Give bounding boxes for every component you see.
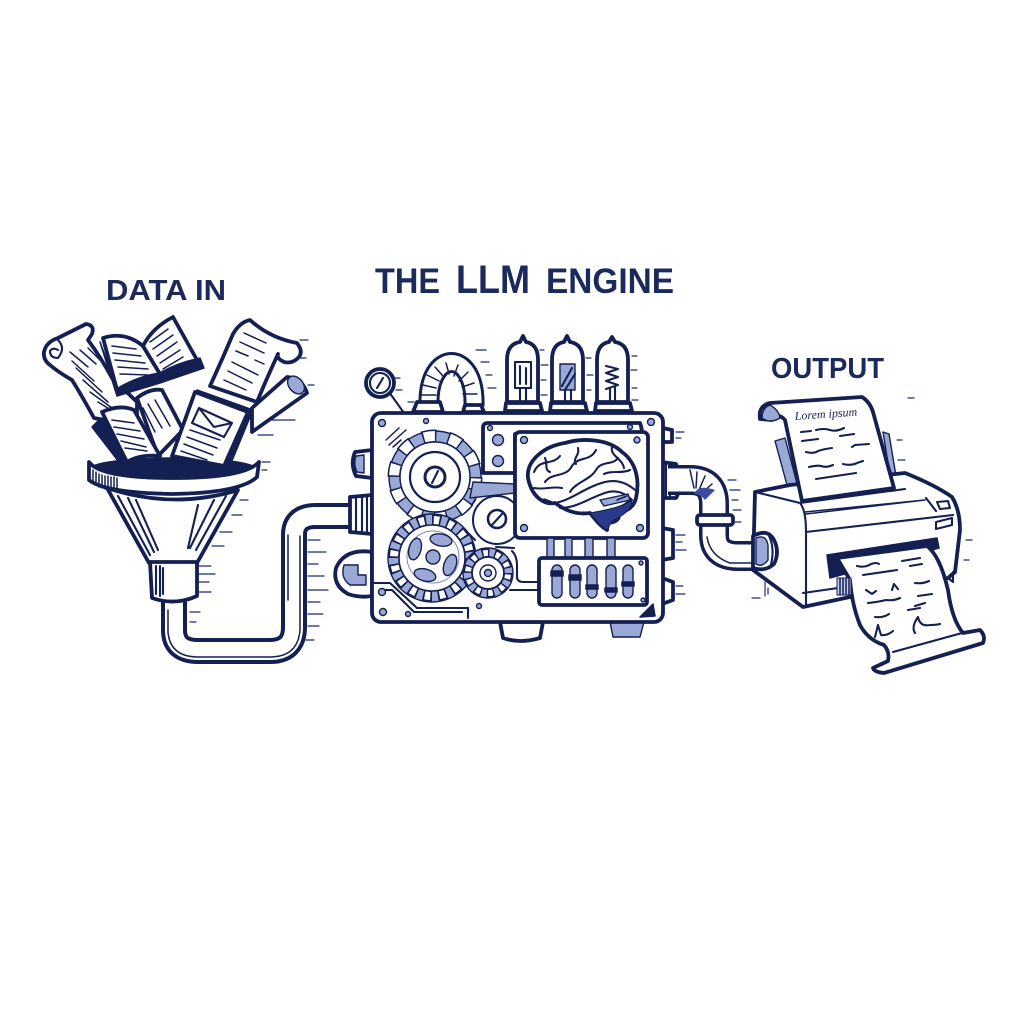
scroll: left bbox=[44, 324, 137, 426]
tablet with envelope icon bbox=[172, 390, 253, 468]
printed page output bbox=[837, 546, 984, 673]
printer output slot bbox=[827, 538, 939, 578]
printed page top: Lorem ipsum bbox=[793, 405, 858, 423]
middle gear bbox=[467, 496, 521, 548]
slider control panel bbox=[539, 558, 647, 605]
shaded link between gear and brain panel bbox=[470, 482, 515, 498]
heading: data in: DATA IN bbox=[106, 275, 226, 307]
engine: main machine bbox=[335, 336, 686, 641]
printer bbox=[753, 397, 984, 673]
wires to slider panel bbox=[510, 551, 539, 590]
heading: the LLM engine bbox=[375, 258, 674, 302]
scroll: right bbox=[210, 320, 301, 402]
screw on middle gear bbox=[488, 510, 506, 528]
printer body bbox=[753, 473, 960, 607]
connector rods bbox=[547, 538, 615, 558]
gear bottom left bbox=[388, 514, 476, 602]
funnel rim band bbox=[89, 462, 259, 494]
vacuum tube 1 bbox=[505, 336, 542, 411]
vacuum tube 2 bbox=[550, 336, 587, 411]
upper brain housing plate bbox=[483, 423, 642, 473]
pressure gauge bbox=[366, 369, 404, 413]
pipe: funnel to engine bbox=[168, 516, 352, 657]
curved top pipe bbox=[413, 362, 484, 412]
side fittings right bbox=[662, 428, 686, 604]
side fittings left bbox=[335, 450, 372, 597]
funnel inner opening bbox=[90, 458, 256, 480]
vacuum tube 3 bbox=[595, 337, 632, 411]
input: documents entering funnel bbox=[44, 317, 314, 602]
printed page top bbox=[760, 397, 894, 501]
brain bbox=[528, 440, 637, 530]
pipe: engine to printer bbox=[668, 470, 760, 563]
small gear bbox=[463, 548, 513, 598]
book: lower open bbox=[92, 390, 183, 466]
book: top open bbox=[100, 317, 204, 396]
machine body bbox=[372, 413, 663, 622]
heading: the LLM engine: ENGINE bbox=[546, 262, 674, 301]
heading: the LLM engine: THE bbox=[375, 262, 440, 301]
large gear top bbox=[389, 431, 481, 523]
funnel bbox=[89, 340, 314, 602]
feet bbox=[500, 622, 644, 641]
brain panel bbox=[515, 432, 648, 538]
pipe flange at printer bbox=[753, 533, 777, 596]
heading: the LLM engine: LLM bbox=[456, 258, 530, 302]
lower plate outline bbox=[373, 583, 468, 618]
paper tray guides bbox=[775, 432, 898, 496]
body corner screws bbox=[378, 418, 655, 617]
roll of paper bbox=[252, 373, 308, 432]
printer body details bbox=[755, 489, 953, 605]
heading: output: OUTPUT bbox=[771, 353, 884, 385]
